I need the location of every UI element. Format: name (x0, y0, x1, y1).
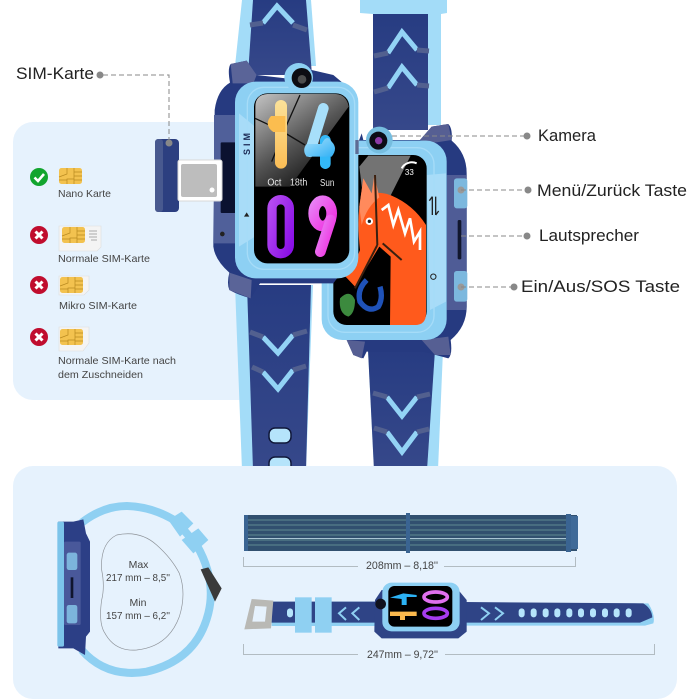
SIM slot (221, 142, 236, 213)
band keepers (295, 597, 332, 633)
power button (454, 271, 467, 302)
digit 1 (268, 100, 287, 169)
SIM option: Mikro SIM-Karte (30, 276, 137, 312)
right watch: camera side (322, 124, 467, 358)
band keepers (168, 512, 208, 553)
SIM option: Normale SIM-Karte (30, 226, 150, 265)
dimension: 208 mm (244, 557, 576, 572)
digit 4 (304, 108, 335, 169)
power icon (431, 274, 436, 279)
panel: SIM card compatibility (13, 122, 248, 400)
label: SIM-Karte (16, 65, 172, 146)
size text: max and min: Max (129, 559, 149, 571)
SIM label: SIM (242, 133, 252, 155)
SIM option: Mikro SIM-Karte: Mikro SIM-Karte (59, 300, 137, 312)
SIM option: Nano Karte (30, 168, 111, 200)
label: SIM-Karte: SIM-Karte (16, 65, 94, 83)
digit 0 (272, 200, 289, 254)
triangle icon (244, 212, 249, 217)
mic icon (220, 232, 225, 236)
speaker slot (458, 220, 461, 259)
silicone band (272, 602, 375, 626)
camera (366, 127, 393, 153)
strap holes (269, 428, 291, 472)
side view watch with band (57, 506, 222, 673)
dimension: 247 mm (244, 644, 654, 661)
band chevrons (339, 607, 503, 620)
label: Menü/Zurück Taste (458, 182, 687, 200)
label: Ein/Aus/SOS Taste: Ein/Aus/SOS Taste (521, 278, 680, 296)
date labels (267, 177, 335, 189)
dimension: 208 mm: 208mm – 8,18'' (366, 560, 438, 572)
date labels: 18th (290, 177, 308, 188)
SIM option: Normale SIM-Karte nach dem Zuschneiden: dem Zuschneiden (58, 369, 143, 381)
menu button (454, 178, 467, 208)
label: Kamera: Kamera (538, 127, 597, 145)
size text: max and min: 217 mm – 8,5'' (106, 572, 170, 584)
watch screen (388, 586, 452, 627)
band holes (287, 608, 632, 617)
watch camera (375, 599, 386, 609)
right watch screen (333, 155, 427, 325)
watch body (374, 590, 467, 638)
left watch body (213, 61, 343, 298)
left watch: SIM side (213, 61, 359, 298)
left watch strap: top (235, 0, 316, 75)
size text: max and min (106, 559, 170, 622)
SIM option: Normale SIM-Karte: Normale SIM-Karte (58, 253, 150, 265)
date labels: Oct (267, 177, 281, 188)
date labels: Sun (320, 178, 335, 189)
panel: dimensions (13, 466, 677, 699)
right watch strap: bottom (368, 350, 443, 470)
label: Ein/Aus/SOS Taste (458, 278, 680, 296)
right watch strap: top (360, 0, 447, 130)
label: Menü/Zurück Taste: Menü/Zurück Taste (537, 182, 687, 200)
wrist outline (101, 534, 183, 650)
label: Lautsprecher: Lautsprecher (539, 227, 640, 245)
watch side body (57, 519, 90, 655)
nylon strap (244, 513, 578, 553)
arrow icon (429, 197, 439, 215)
right edge button (355, 140, 359, 154)
SIM option: Normale SIM-Karte nach dem Zuschneiden: Normale SIM-Karte nach (58, 355, 176, 367)
clasp (201, 567, 222, 602)
left watch case (235, 82, 358, 278)
watch case (382, 583, 460, 631)
digit 9 (314, 201, 332, 252)
label: Kamera (392, 127, 597, 145)
band loop (82, 506, 211, 673)
camera (284, 63, 313, 92)
full strap with watch (244, 583, 654, 638)
right watch case (322, 141, 447, 340)
SIM option: Normale SIM-Karte nach dem Zuschneiden (30, 327, 176, 381)
SIM tray (155, 139, 222, 212)
label: Lautsprecher (461, 227, 640, 245)
left watch strap: bottom (235, 285, 313, 472)
right watch body (347, 124, 467, 358)
left watch screen (254, 93, 349, 263)
buckle (244, 599, 273, 629)
SIM option: Nano Karte: Nano Karte (58, 188, 111, 200)
right watch screen: 33 (405, 168, 414, 177)
dimension: 247 mm: 247mm – 9,72'' (367, 649, 438, 661)
size text: max and min: Min (130, 597, 147, 609)
size text: max and min: 157 mm – 6,2'' (106, 610, 170, 622)
